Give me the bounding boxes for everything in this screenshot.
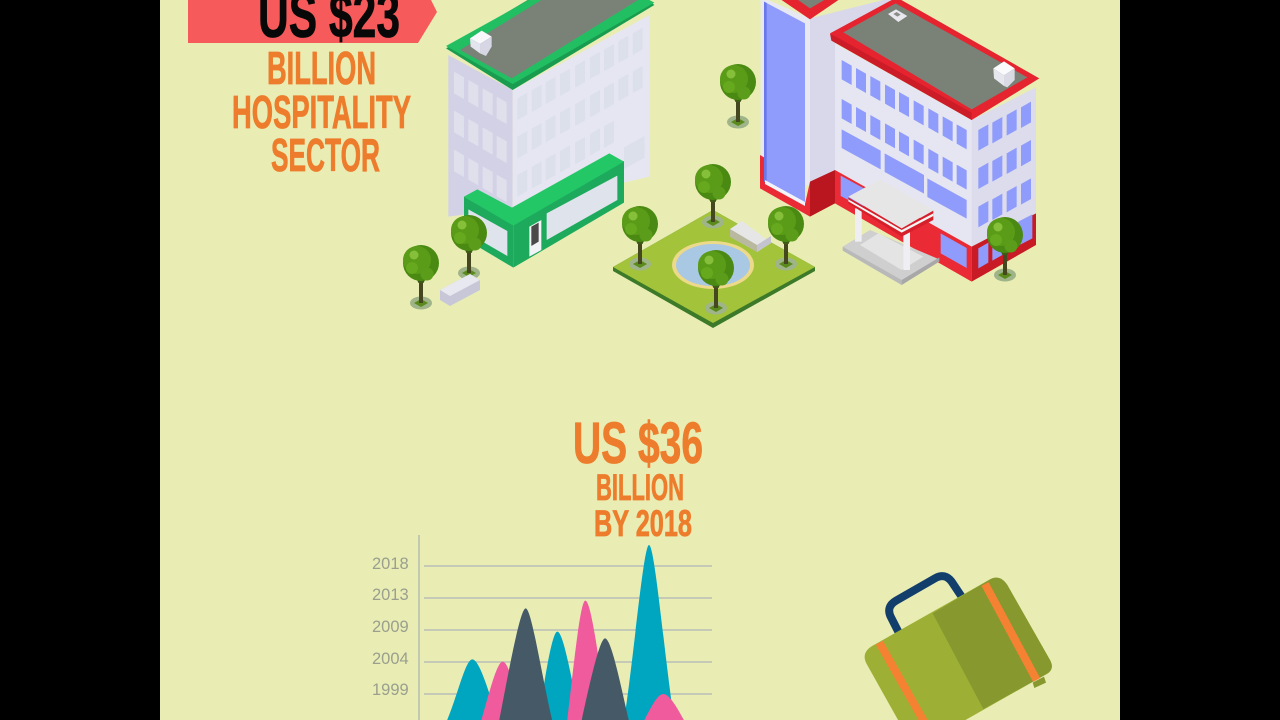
body (865, 578, 1052, 720)
annex (464, 197, 513, 268)
straps (879, 643, 925, 720)
suitcase icon (865, 576, 1052, 720)
heading: US $36 billion by 2018: BY 2018 (594, 503, 692, 544)
plaza with pond (613, 210, 815, 328)
axis years: 2004 (372, 650, 409, 668)
ribbon: US $23 (188, 0, 437, 51)
heading: billion hospitality sector (232, 42, 411, 181)
peaks (445, 545, 687, 720)
main facades (835, 43, 972, 247)
axis years: 1999 (372, 681, 409, 699)
axis years: 2013 (372, 586, 409, 604)
bench (730, 221, 771, 252)
heading: US $36 billion by 2018 (573, 411, 703, 544)
bench left (440, 274, 480, 306)
roof (446, 0, 654, 90)
right windows (517, 28, 645, 197)
windows right (978, 124, 988, 151)
trees (403, 64, 1023, 314)
handle (889, 576, 962, 632)
heading: US $36 billion by 2018: US $36 (573, 411, 703, 476)
red hotel building (760, 0, 1039, 285)
rooftop unit (470, 31, 492, 56)
background panel (160, 0, 1120, 720)
clasp (1033, 677, 1046, 688)
base windows (841, 176, 863, 208)
roof vent (888, 9, 907, 22)
heading: US $36 billion by 2018: BILLION (596, 467, 684, 508)
roof (830, 0, 1039, 120)
windows left (841, 60, 1032, 268)
rooftop unit (993, 61, 1015, 87)
axis years (372, 555, 409, 699)
portico (843, 230, 939, 285)
heading: billion hospitality sector: HOSPITALITY (232, 86, 411, 138)
axis years: 2009 (372, 618, 409, 636)
left windows (454, 72, 507, 202)
axis years: 2018 (372, 555, 409, 573)
heading: billion hospitality sector: SECTOR (271, 129, 380, 181)
heading: billion hospitality sector: BILLION (267, 42, 376, 94)
green building (446, 0, 654, 268)
tower (810, 0, 897, 187)
area chart (372, 535, 712, 720)
